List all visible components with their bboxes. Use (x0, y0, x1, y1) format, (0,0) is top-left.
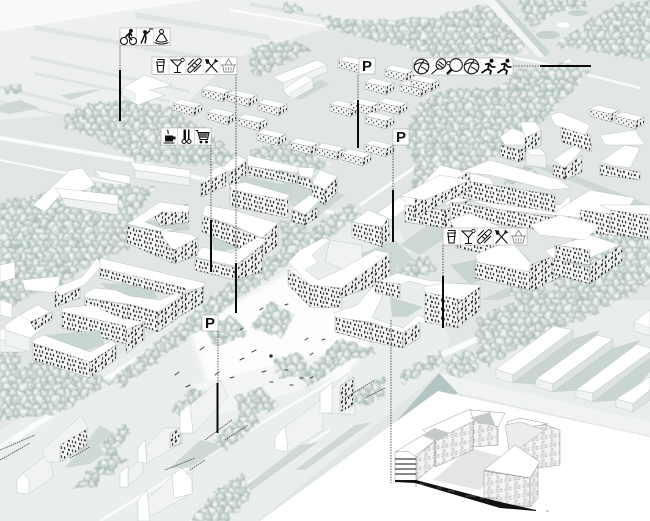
warehouse bars (496, 310, 650, 412)
pitch (483, 0, 592, 57)
field stripes (0, 2, 400, 127)
parking sign north: P (362, 58, 372, 75)
parallel parking rows on street (0, 380, 385, 470)
bottom white site and retaining wall (260, 373, 650, 521)
parking sign centre: P (396, 129, 406, 146)
parking sign south (202, 315, 218, 332)
shadow patches (0, 80, 650, 490)
parking sign north (359, 58, 375, 75)
parking sign south: P (205, 315, 215, 332)
apartment block: centre courtyard with dotted line (334, 273, 482, 348)
thick black markers (120, 66, 591, 433)
apartment block: north centre south wing (195, 205, 278, 280)
white plaza (190, 265, 370, 415)
icon box: cup cocktail hotdog fork basket east (443, 228, 527, 245)
plaza parking dashes (175, 304, 325, 387)
parking sign centre (393, 129, 409, 146)
apartment block: central west (288, 190, 410, 308)
apartment block: west courtyard (127, 202, 198, 264)
icon box: sports (413, 57, 513, 75)
apartment block: north centre (201, 155, 337, 225)
section model bottom right (395, 409, 560, 511)
gabled houses southwest (17, 373, 355, 521)
dotted callout leader lines (120, 46, 540, 483)
townhouse clusters north (173, 56, 644, 166)
sheds (0, 60, 327, 352)
apartment block: east (500, 112, 650, 284)
icon box: coffee scissors cart (161, 128, 211, 145)
apartment block: south-west ring (55, 258, 205, 354)
icon box: bike fitness yoga (120, 28, 170, 46)
icon box: cup cocktail hotdog fork basket (152, 57, 237, 74)
apartment block: north-east courtyard (400, 160, 600, 265)
apartment block: south-west lower (5, 305, 118, 378)
apartment block: east centre (400, 165, 570, 292)
